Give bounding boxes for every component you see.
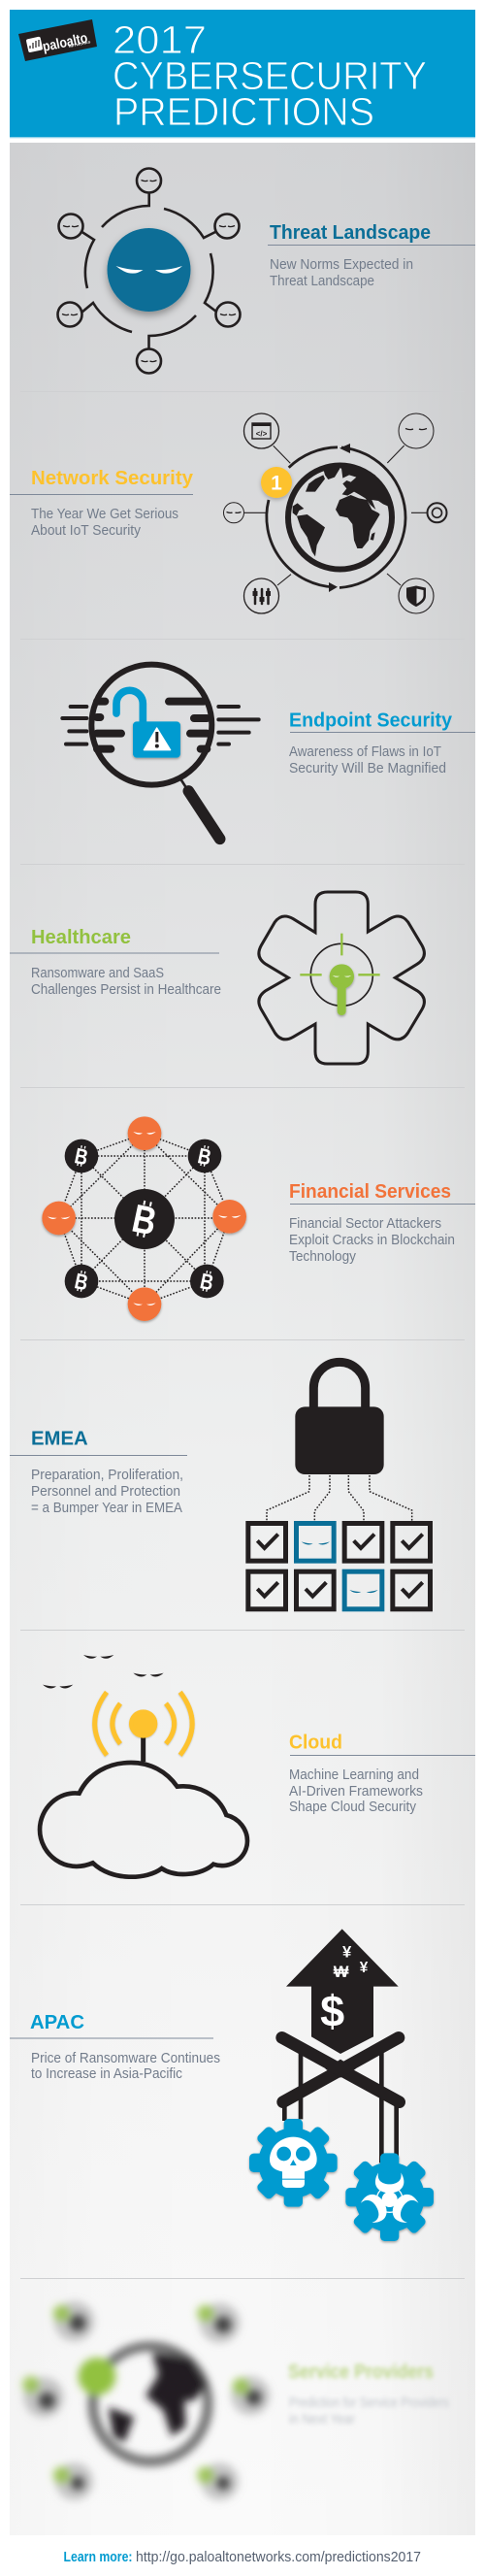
icon: rising price arrow	[286, 1929, 399, 2054]
text: network security description: The Year We Get Serious	[31, 506, 178, 522]
icon: rising price arrow: ₩	[334, 1963, 349, 1981]
text: financial services description: Technology	[289, 1248, 356, 1265]
text: APAC description: to Increase in Asia-Pacific	[31, 2065, 182, 2082]
text: endpoint security description: Awareness of Flaws in IoT	[289, 743, 441, 760]
text: cloud description	[289, 1767, 423, 1815]
heading: healthcare: Healthcare	[31, 927, 131, 948]
badge: number one: 1	[271, 472, 282, 495]
icon: rising price arrow: ¥	[342, 1943, 352, 1962]
heading: APAC: APAC	[30, 2012, 84, 2033]
icon: star of life with key	[259, 892, 424, 1064]
heading: financial services: Financial Services	[289, 1181, 451, 1203]
text: healthcare description: Ransomware and SaaS	[31, 965, 164, 981]
icon: cloud with antenna	[40, 1692, 247, 1877]
icon: blockchain network	[42, 1116, 246, 1321]
icon: skull gear	[249, 2119, 338, 2207]
title: PREDICTIONS	[113, 89, 374, 134]
icon: flying eyes	[43, 1655, 164, 1688]
panel: threat landscape	[58, 169, 475, 373]
title: 2017	[113, 17, 207, 62]
heading: threat landscape: Threat Landscape	[270, 222, 431, 244]
text: EMEA description	[31, 1467, 183, 1516]
icon: ransom arrow with gears	[249, 1929, 434, 2241]
text: network security description	[31, 506, 178, 539]
heading: cloud: Cloud	[289, 1733, 342, 1754]
icon: crossbones	[282, 2037, 400, 2102]
panel: healthcare	[10, 892, 424, 1064]
footer link: http://go.paloaltonetworks.com/predictions2017	[136, 2549, 421, 2565]
panel: endpoint security	[62, 665, 475, 839]
text: threat landscape description: New Norms Expected in	[270, 256, 413, 273]
icon: blockchain network: B	[196, 1142, 213, 1170]
heading: endpoint security: Endpoint Security	[289, 710, 453, 732]
panel: network security	[10, 413, 446, 613]
icon: globe with threats	[223, 413, 446, 613]
logo: Palo Alto Networks	[18, 19, 97, 61]
text: endpoint security description: Security Will Be Magnified	[289, 760, 446, 776]
text: EMEA description: Preparation, Proliferation,	[31, 1467, 183, 1483]
icon: rising price arrow: ¥	[360, 1960, 369, 1976]
text: healthcare description: Challenges Persist in Healthcare	[31, 981, 221, 998]
text: threat landscape description: Threat Landscape	[270, 273, 374, 289]
title	[113, 17, 427, 134]
panel: EMEA	[10, 1362, 430, 1609]
globe land masses	[293, 465, 391, 556]
text: network security description: About IoT Security	[31, 522, 141, 539]
icon: padlock with checklist	[248, 1362, 430, 1609]
icon: biohazard gear	[345, 2153, 434, 2241]
icon: threat network	[58, 169, 241, 373]
icon: blockchain network: B	[73, 1268, 90, 1295]
heading: EMEA: EMEA	[31, 1429, 88, 1450]
icon: magnifier with open lock	[62, 665, 259, 839]
text: cloud description: Machine Learning and	[289, 1767, 419, 1783]
icon: rising price arrow: $	[320, 1987, 344, 2036]
text: EMEA description: Personnel and Protection	[31, 1483, 180, 1500]
text: cloud description: AI-Driven Frameworks	[289, 1783, 423, 1800]
heading: network security: Network Security	[31, 468, 194, 489]
heading: service providers: Service Providers	[288, 2361, 434, 2383]
panel: financial services	[42, 1116, 475, 1321]
panel: cloud	[40, 1655, 475, 1877]
text: healthcare description	[31, 965, 221, 998]
text: APAC description	[31, 2050, 220, 2082]
logo: Palo Alto Networks: paloalto	[42, 30, 89, 55]
text: endpoint security description	[289, 743, 446, 776]
icon: blockchain network: B	[128, 1196, 160, 1244]
text: APAC description: Price of Ransomware Continues	[31, 2050, 220, 2066]
icon: globe with threats: </>	[256, 429, 268, 439]
panel: APAC	[10, 1929, 434, 2241]
text: service providers description: in Next Year	[289, 2411, 355, 2427]
text: threat landscape description	[270, 256, 413, 289]
text: financial services description: Financial Sector Attackers	[289, 1215, 441, 1232]
text: financial services description: Exploit Cracks in Blockchain	[289, 1232, 455, 1248]
text: EMEA description: = a Bumper Year in EMEA	[31, 1500, 182, 1516]
icon: blurred globe	[22, 2301, 270, 2500]
panel: service providers (blurred)	[22, 2301, 449, 2500]
footer link: Learn more:	[64, 2549, 132, 2565]
icon: blockchain network: B	[73, 1142, 90, 1170]
icon: blockchain network: B	[198, 1268, 215, 1295]
title: CYBERSECURITY	[113, 53, 427, 98]
text: cloud description: Shape Cloud Security	[289, 1799, 416, 1815]
logo: Palo Alto Networks: NETWORKS	[68, 40, 91, 49]
badge: number one	[261, 467, 292, 498]
text: service providers description	[289, 2394, 449, 2427]
header banner	[10, 10, 475, 138]
text: financial services description	[289, 1215, 455, 1265]
